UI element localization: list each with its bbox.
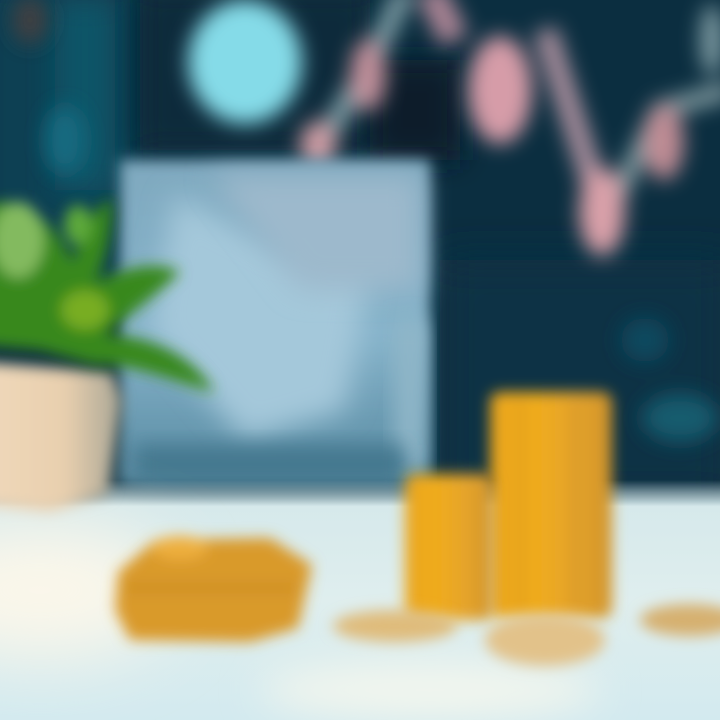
blurred cyan circle light xyxy=(188,0,302,124)
coin stack: tall xyxy=(490,392,612,618)
table surface xyxy=(0,480,720,720)
glass panel xyxy=(120,160,430,485)
plant leaves xyxy=(0,200,214,392)
loose coins xyxy=(333,604,720,666)
dim background spots xyxy=(12,0,718,442)
blurred stock chart line xyxy=(300,0,720,256)
coin pile: low xyxy=(115,536,312,642)
plant pot xyxy=(0,362,122,512)
table highlight right xyxy=(260,662,600,718)
coin stack: medium xyxy=(405,474,493,620)
table highlight xyxy=(0,525,170,655)
